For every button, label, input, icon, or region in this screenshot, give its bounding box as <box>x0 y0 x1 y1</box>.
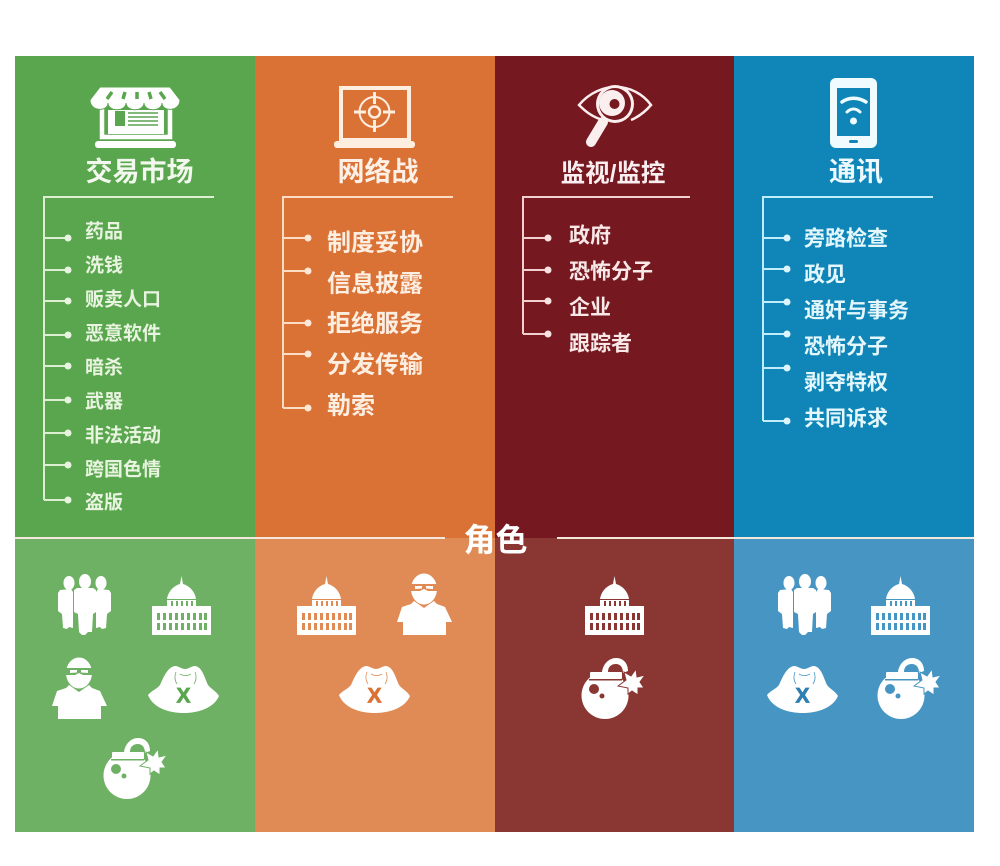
actor icons: X <box>795 684 810 708</box>
list items: 恐怖分子 <box>569 260 653 284</box>
list items: 跟踪者 <box>569 332 632 356</box>
actor icons <box>52 574 219 799</box>
icon: storefront <box>90 87 180 148</box>
list items: 恶意软件 <box>85 322 161 344</box>
list items: 共同诉求 <box>804 408 888 430</box>
list items <box>327 230 423 420</box>
list items: 制度妥协 <box>327 230 423 256</box>
list items: 政见 <box>804 264 846 286</box>
list items: 非法活动 <box>85 424 161 446</box>
list items: 信息披露 <box>327 270 423 298</box>
actor icons: X <box>367 684 382 708</box>
list items: 恐怖分子 <box>804 336 888 358</box>
panel: 网络战 <box>255 56 495 832</box>
heading: 交易市场: 交易市场 <box>86 157 194 187</box>
panel background bottom <box>734 538 974 832</box>
panel background bottom <box>255 538 495 832</box>
list items: 企业 <box>569 296 611 320</box>
list items: 药品 <box>85 220 123 242</box>
divider: roles <box>15 537 974 539</box>
actor icons <box>582 576 645 719</box>
list bullets <box>544 234 552 338</box>
list items: 政府 <box>569 224 611 248</box>
list tree <box>523 197 690 334</box>
list items: 勒索 <box>327 392 375 420</box>
list items <box>85 220 161 514</box>
list tree <box>44 197 214 500</box>
heading: 角色: 角色 <box>463 522 528 558</box>
icon: eye and magnifier <box>579 85 651 142</box>
list items <box>569 224 653 356</box>
list items: 跨国色情 <box>85 458 161 480</box>
panel background bottom <box>495 538 734 832</box>
icon: phone with wifi <box>830 78 877 148</box>
panel background top <box>734 56 974 538</box>
list items: 暗杀 <box>85 356 123 378</box>
list tree <box>763 197 933 421</box>
panel background top <box>255 56 495 538</box>
list items: 分发传输 <box>327 352 423 378</box>
list items: 贩卖人口 <box>85 288 161 310</box>
list items: 剥夺特权 <box>804 372 888 394</box>
list bullets <box>784 234 790 424</box>
heading: 监视/监控: 监视/监控 <box>561 160 665 188</box>
list bullets <box>64 234 72 504</box>
actor icons: X <box>176 684 191 708</box>
list tree <box>283 197 453 408</box>
list items: 盗版 <box>85 492 123 514</box>
panel: 监视/监控 <box>495 56 734 832</box>
list items: 旁路检查 <box>804 226 888 250</box>
heading: 网络战: 网络战 <box>338 157 418 187</box>
actor icons <box>297 574 452 713</box>
actor icons <box>767 574 941 719</box>
panel: 通讯 <box>734 56 974 832</box>
icon: monitor with target <box>334 88 415 148</box>
list bullets <box>304 234 312 412</box>
list items: 通奸与事务 <box>804 298 909 322</box>
list items: 武器 <box>85 390 123 412</box>
panel background top <box>495 56 734 538</box>
panel background bottom <box>15 538 255 832</box>
panel background top <box>15 56 255 538</box>
list items <box>804 226 909 430</box>
list items: 拒绝服务 <box>327 310 423 338</box>
list items: 洗钱 <box>85 254 123 276</box>
panel: 交易市场 <box>15 56 255 832</box>
heading: 通讯: 通讯 <box>829 157 883 187</box>
